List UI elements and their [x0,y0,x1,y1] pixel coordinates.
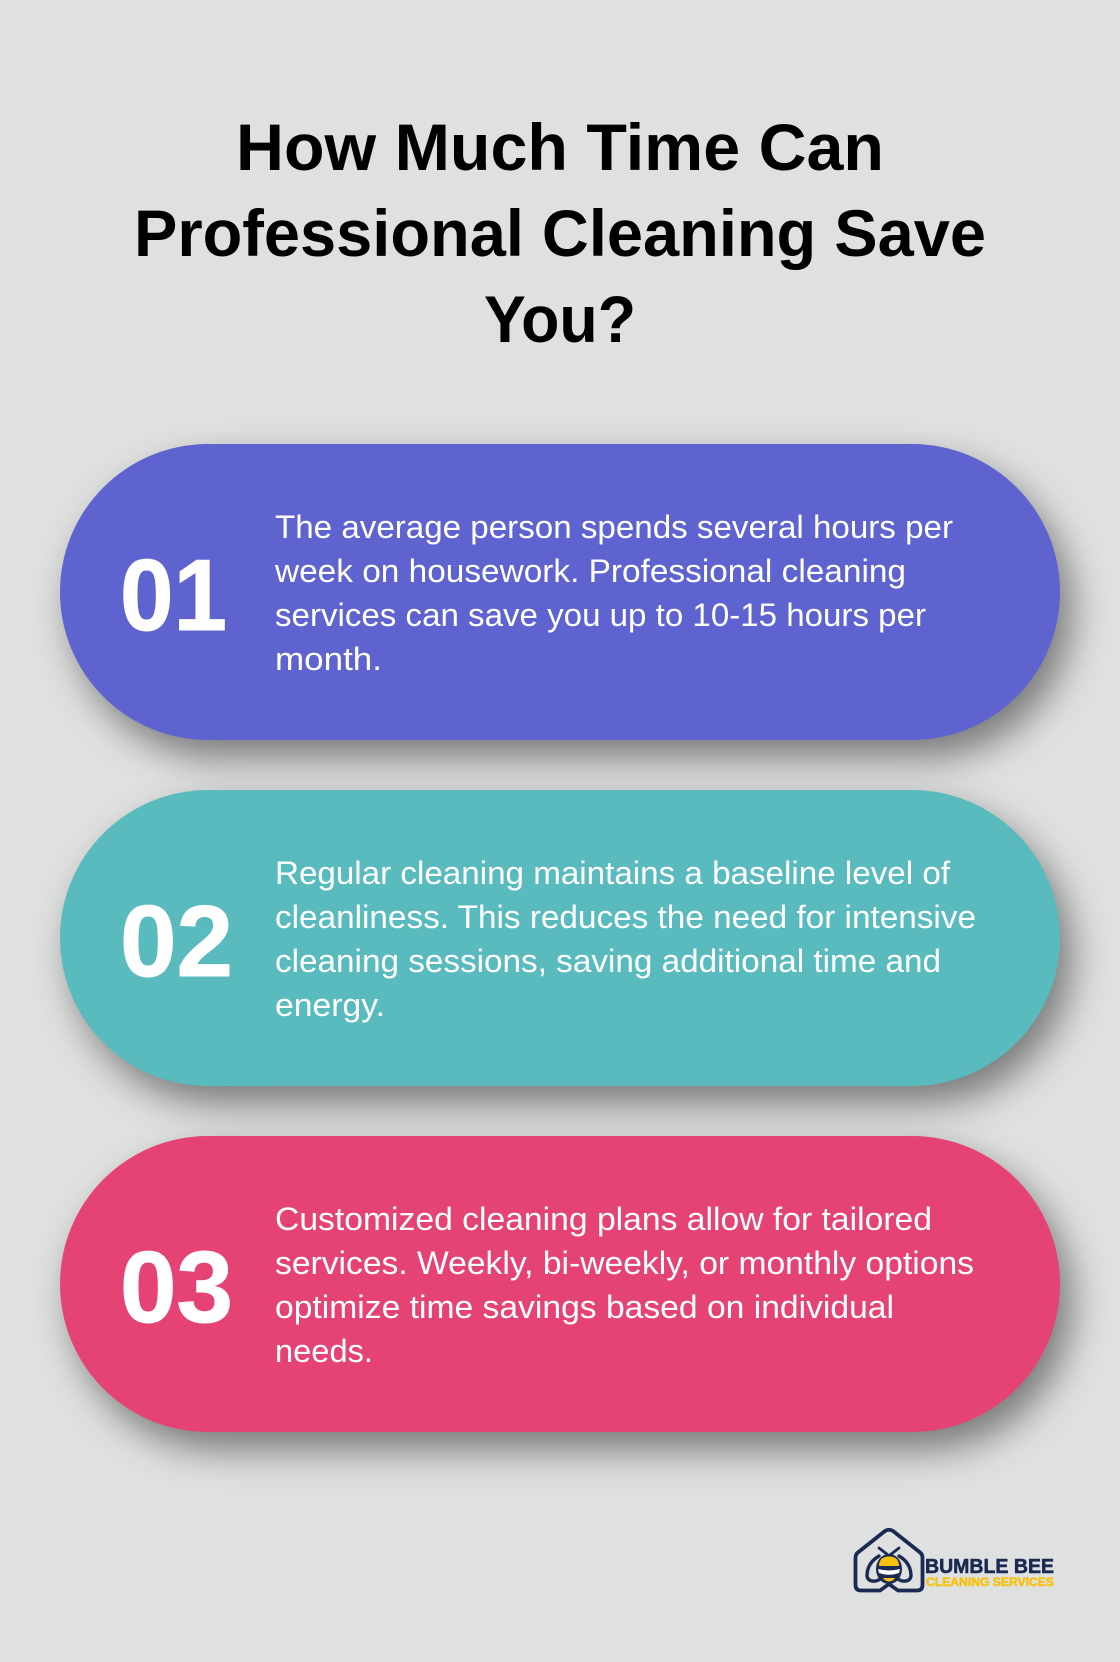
title: Professional Cleaning Save [134,196,986,270]
text block 02: cleaning sessions, saving additional time and [275,943,941,979]
number 02: 02 [120,886,233,998]
text block 03 [275,1201,974,1369]
logo: Bumble Bee Cleaning Services [856,1530,1054,1590]
icon: house with bee [856,1530,922,1590]
logo tagline: CLEANING SERVICES [926,1575,1054,1589]
text block 01: services can save you up to 10-15 hours per [275,597,926,633]
text block 02: Regular cleaning maintains a baseline level of [275,855,951,891]
logo wordmark: BUMBLE BEE [925,1555,1054,1578]
text block 03: optimize time savings based on individual [275,1289,894,1325]
number 03: 03 [120,1232,233,1344]
title: You? [484,282,636,356]
title: How Much Time Can [236,110,884,184]
title [134,110,986,356]
text block 01: month. [275,641,382,677]
text block 02: energy. [275,987,385,1023]
text block 01: The average person spends several hours per [275,509,953,545]
text block 02: cleanliness. This reduces the need for intensive [275,899,976,935]
panel: step 03 [60,1136,1072,1450]
text block 01 [274,509,953,677]
text block 03: needs. [275,1333,373,1369]
text block 01: week on housework. Professional cleaning [274,553,906,589]
panel: step 02 [60,790,1072,1104]
text block 02 [275,855,976,1023]
panel: step 01 [60,444,1072,758]
text block 03: services. Weekly, bi-weekly, or monthly options [275,1245,974,1281]
number 01: 01 [120,540,227,652]
text block 03: Customized cleaning plans allow for tailored [275,1201,932,1237]
